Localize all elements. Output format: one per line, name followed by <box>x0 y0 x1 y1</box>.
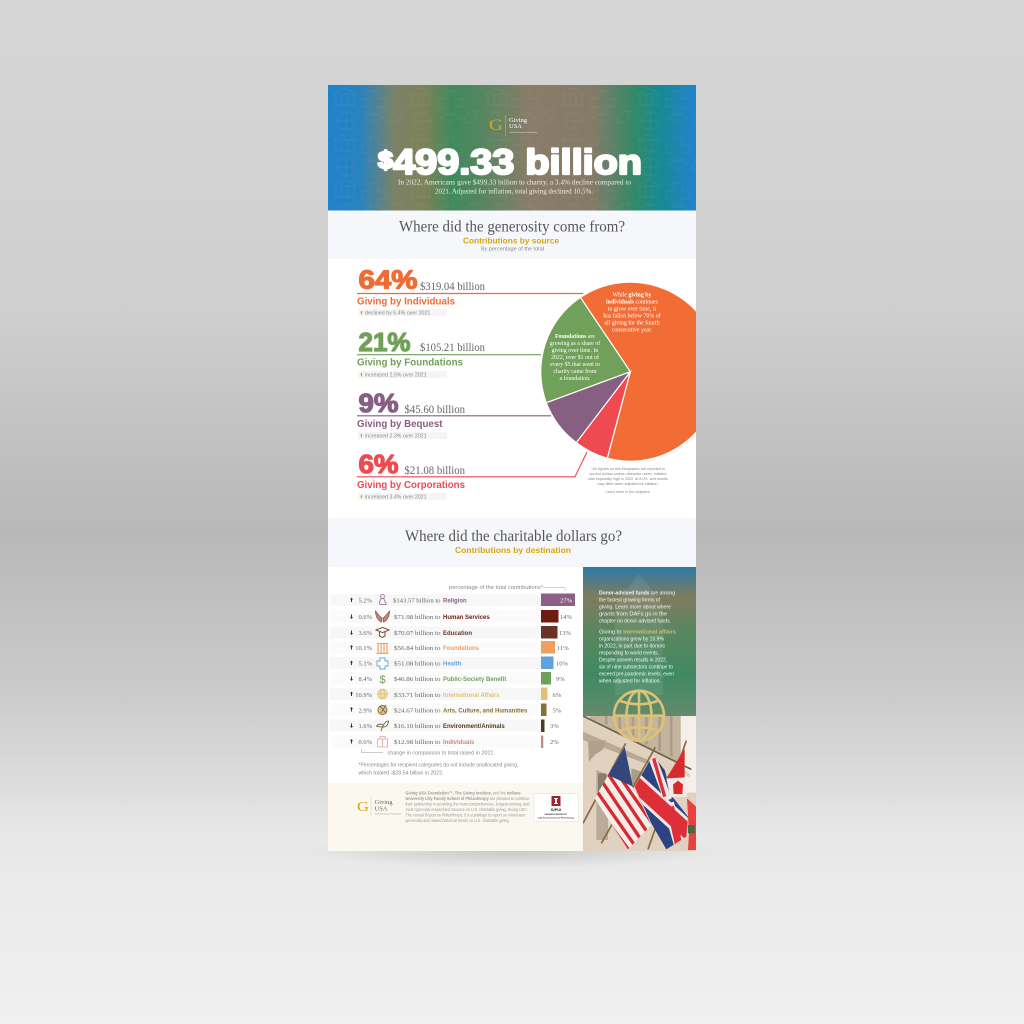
sidebar gradient <box>583 567 696 716</box>
row: education: $70.07 billion to <box>394 630 440 637</box>
heading band: sources <box>328 210 696 259</box>
sidebar text: responding to world events. <box>599 650 659 656</box>
source: foundations: $105.21 billion <box>420 341 485 354</box>
row: education <box>330 626 572 638</box>
footer logo: Giving <box>374 799 393 806</box>
row: human services: 0.6% <box>358 614 373 621</box>
footnote: figures: Learn more in the chapters. <box>605 490 651 494</box>
row: health: 5.1% <box>358 660 373 668</box>
row: foundations: Foundations <box>443 646 480 652</box>
title: total giving: 499.33 billion <box>393 143 642 182</box>
sidebar text: Despite uneven results in 2022, <box>599 658 667 664</box>
row: environment: $16.10 billion to <box>394 723 440 730</box>
row: environment: 3% <box>550 723 559 730</box>
heading band: sources: Where did the generosity come from? <box>399 218 625 236</box>
row: individuals: Individuals <box>443 740 475 746</box>
footnote: unallocated <box>358 762 518 776</box>
source: bequest: $45.60 billion <box>404 403 465 416</box>
heading band: sources: By percentage of the total <box>481 246 544 252</box>
footnote: unallocated: which totaled -$28.54 billion in 2022. <box>358 770 444 776</box>
row: foundations: 11% <box>557 645 569 652</box>
pie note: individuals: individuals continues <box>606 300 659 306</box>
pie note: individuals: While giving by <box>613 292 652 298</box>
source: corporations <box>357 449 587 500</box>
footnote: figures: was especially high in 2022, at 8.0%, and results <box>588 477 668 481</box>
footer text: University Lilly Family School of Philanthropy are pleased to continue <box>406 796 530 801</box>
sidebar text: in 2022, in part due to donors <box>599 644 665 650</box>
row: individuals: 2% <box>550 739 559 746</box>
sidebar text: the fastest growing forms of <box>599 598 660 604</box>
sidebar text: Giving to international affairs <box>599 630 676 636</box>
logo: Giving USA: G <box>489 117 504 134</box>
source: corporations: $21.08 billion <box>404 464 465 477</box>
footer logo: G <box>357 800 369 815</box>
footnote: unallocated: *Percentages for recipient categories do not include unallocated giving, <box>358 762 518 768</box>
row: international affairs: $33.71 billion to <box>394 692 440 699</box>
source: bequest: 9% <box>358 388 398 418</box>
poster sheet <box>328 85 696 851</box>
header gradient <box>328 85 696 210</box>
footer text: generosity and related historical trends on U.S. charitable giving. <box>406 818 510 823</box>
slice: corporations <box>576 372 630 458</box>
logo: Giving USA: Giving <box>509 117 528 124</box>
pie note: individuals: has fallen below 70% of <box>603 312 661 320</box>
row: foundations <box>330 641 569 654</box>
footer logo: USA <box>374 806 388 812</box>
US flag <box>594 746 652 850</box>
IUPUI logo: INDIANA UNIVERSITY <box>545 813 568 816</box>
panel: footer <box>328 783 583 851</box>
row: environment: 1.6% <box>358 723 373 730</box>
pie note: individuals <box>603 292 661 334</box>
logo: Giving USA <box>489 115 537 136</box>
header description: 2021. Adjusted for inflation, total giving declined 10.5%. <box>435 186 593 196</box>
row: environment: Environment/Animals <box>443 724 505 730</box>
footer text: their partnership in providing the most comprehensive, longest-running, and <box>406 802 530 806</box>
sidebar text: when adjusted for inflation. <box>598 678 661 684</box>
IUPUI logo <box>534 794 578 822</box>
UK flag <box>633 753 690 852</box>
title: total giving: $ <box>378 147 394 174</box>
source: corporations: Giving by Corporations <box>357 479 465 491</box>
row: international affairs: 10.9% <box>355 692 373 699</box>
pie note: foundations: charity came from <box>553 368 597 375</box>
row: health <box>330 656 568 669</box>
upper columns <box>590 716 681 765</box>
row: religion <box>330 594 575 606</box>
window <box>596 770 608 840</box>
footer text: most rigorously researched resource on U.S. charitable giving, Giving USA: <box>406 807 528 812</box>
heading band: destinations <box>328 518 696 567</box>
footer text <box>406 790 530 823</box>
slice: individuals <box>581 282 696 461</box>
panel: source list <box>357 264 587 500</box>
footer logo: The Annual Report on Philanthropy <box>374 812 401 816</box>
source: corporations: 6% <box>358 449 398 479</box>
row: education: 13% <box>559 630 572 637</box>
sidebar text <box>598 590 676 684</box>
source: foundations: 21% <box>358 327 410 357</box>
pie note: individuals: consecutive year. <box>612 328 653 334</box>
sidebar text: Donor-advised funds are among <box>599 590 675 596</box>
source: foundations: increased 2.5% over 2021 <box>365 372 427 378</box>
sidebar text: giving. Learn more about where <box>599 604 671 610</box>
row: public-society benefit <box>330 672 565 686</box>
photo: flags on building <box>583 716 696 853</box>
source: individuals: 64% <box>358 264 418 294</box>
row: human services: Human Services <box>443 615 490 621</box>
pie note: foundations: a foundation. <box>559 375 591 382</box>
footnote: figures <box>588 467 668 494</box>
row: public-society benefit: 8.4% <box>358 676 373 683</box>
row: health: Health <box>443 662 462 668</box>
row: individuals <box>330 736 559 748</box>
row: arts <box>330 704 562 716</box>
row: human services: $71.98 billion to <box>394 614 440 621</box>
row: human services: 14% <box>560 614 572 621</box>
row: health: $51.08 billion to <box>394 660 440 668</box>
globe icon <box>614 690 664 741</box>
sidebar text: organizations grew by 10.9% <box>599 636 664 642</box>
source: individuals: declined by 6.4% over 2021 <box>365 310 430 316</box>
cornice <box>583 716 691 769</box>
row: arts: $24.67 billion to <box>394 708 440 714</box>
row: education: 3.6% <box>358 630 373 637</box>
panel: destination chart <box>330 585 575 776</box>
Canada flag <box>666 748 687 797</box>
source: bequest <box>357 388 551 440</box>
row: religion: 5.2% <box>358 598 373 604</box>
pie note: foundations: 2022, over $1 out of <box>551 354 599 361</box>
row: arts: 5% <box>552 708 562 714</box>
header icon pattern <box>328 85 696 210</box>
sidebar text: grants from DAFs go in the <box>599 612 667 618</box>
source: individuals: Giving by Individuals <box>357 296 455 308</box>
row: environment <box>330 720 559 732</box>
sidebar decorative bank shape <box>615 574 663 695</box>
header description <box>398 178 631 196</box>
sidebar text: exceed pre-pandemic levels, even <box>599 672 674 678</box>
heading band: destinations: Contributions by destination <box>455 545 571 555</box>
chart caption: percentage of the total contributions* <box>449 585 543 591</box>
footer logo <box>357 796 401 817</box>
IUPUI logo: Lilly Family School of Philanthropy <box>538 816 575 820</box>
heading band: sources: Contributions by source <box>463 236 559 246</box>
row: arts: Arts, Culture, and Humanities <box>443 708 528 714</box>
row: education: Education <box>443 631 472 637</box>
row: religion: Religion <box>443 598 467 604</box>
stone wall <box>583 716 696 852</box>
footnote: figures: *All figures on this infographic are reported in <box>591 467 665 471</box>
row: public-society benefit: $46.86 billion to <box>394 676 440 683</box>
row: public-society benefit: $ <box>379 674 386 686</box>
row: international affairs: 6% <box>552 692 562 699</box>
row: public-society benefit: Public-Society Benefit <box>443 677 506 683</box>
row: individuals: $12.98 billion to <box>394 739 440 746</box>
footer text: The Annual Report on Philanthropy. It is a privilege to report on Americans' <box>406 812 526 818</box>
source: individuals: $319.04 billion <box>420 280 485 293</box>
row: international affairs: International Affairs <box>443 693 500 699</box>
logo: Giving USA: The Annual Report on Philanthropy <box>509 131 537 134</box>
slice: foundations <box>541 297 630 403</box>
pie note: foundations: Foundations are <box>555 334 595 340</box>
row: foundations: $56.84 billion to <box>394 645 440 652</box>
row: religion: 27% <box>560 598 573 604</box>
source: foundations: Giving by Foundations <box>357 356 463 368</box>
pie note: foundations: every $5 that went to <box>550 361 600 368</box>
sidebar text: six of nine subsectors continue to <box>599 664 673 670</box>
row: human services <box>330 610 572 622</box>
panel: header <box>328 85 696 210</box>
chart note: change: change in comparison to total raised in 2021 <box>388 750 494 756</box>
footnote: figures: current dollars unless otherwise noted. Inflation <box>589 472 667 476</box>
source: individuals <box>357 264 583 316</box>
source: bequest: Giving by Bequest <box>357 418 443 430</box>
panel: sidebar <box>583 567 696 853</box>
row: foundations: 10.1% <box>355 645 373 652</box>
footnote: figures: may differ when adjusted for inflation. <box>597 482 659 486</box>
chart note: change <box>362 749 494 756</box>
slice: bequest <box>546 372 630 443</box>
pie note: individuals: to grow over time, it <box>608 306 656 312</box>
pie chart <box>541 282 696 461</box>
source: bequest: increased 2.3% over 2021 <box>365 434 427 440</box>
source: foundations <box>357 327 541 378</box>
pie note: foundations <box>550 334 600 382</box>
source: corporations: increased 3.4% over 2021 <box>365 494 427 500</box>
pie note: foundations: growing as a share of <box>550 340 600 347</box>
row: public-society benefit: 9% <box>556 676 565 683</box>
poster shadow <box>302 834 722 868</box>
ornament <box>588 740 606 762</box>
footer text: Giving USA Foundation™, The Giving Institute, and the Indiana <box>406 790 521 796</box>
row: individuals: 0.6% <box>358 739 373 746</box>
logo: Giving USA: USA <box>509 123 522 130</box>
IUPUI logo: IUPUI <box>551 808 561 812</box>
heading band: destinations: Where did the charitable dollars go? <box>405 528 622 545</box>
row: arts: 2.9% <box>358 708 373 714</box>
row: international affairs <box>330 688 562 700</box>
lower-right flag <box>687 798 696 850</box>
sidebar text: chapter on donor-advised funds. <box>599 618 671 624</box>
row: religion: $143.57 billion to <box>393 598 440 604</box>
pie note: foundations: giving over time. In <box>552 348 598 354</box>
row: health: 10% <box>556 660 568 668</box>
header description: In 2022, Americans gave $499.33 billion to charity, a 3.4% decline compared to <box>398 178 631 186</box>
pie note: individuals: all giving for the fourth <box>604 320 660 326</box>
sky <box>681 716 696 793</box>
flag poles <box>583 741 686 849</box>
